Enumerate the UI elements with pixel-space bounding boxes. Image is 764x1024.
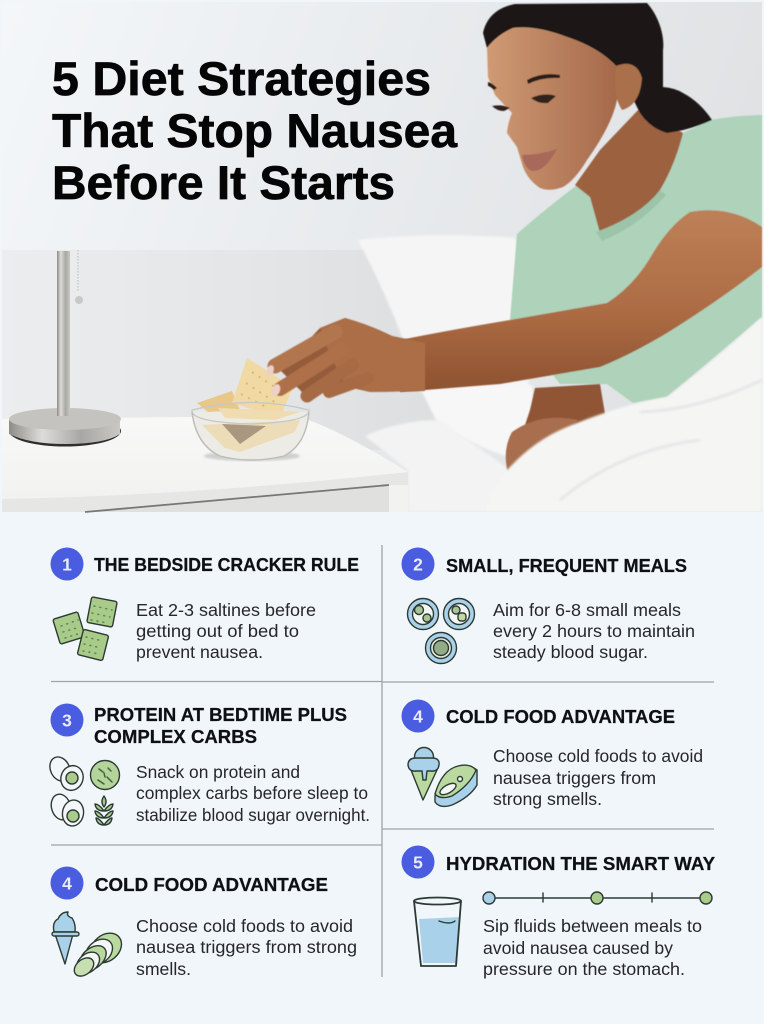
body text 3 <box>136 762 370 825</box>
body text 1: getting out of bed to <box>136 621 299 641</box>
icon: three small plates <box>408 598 474 664</box>
body text 4 left: nausea triggers from strong <box>136 937 357 957</box>
body text 2: every 2 hours to maintain <box>493 621 695 641</box>
timeline <box>483 892 712 904</box>
bed sheet <box>365 420 510 512</box>
body text 5: Sip fluids between meals to <box>483 916 702 936</box>
number badge 2 <box>402 548 434 580</box>
hand holding cracker <box>265 318 425 397</box>
title: Before It Starts <box>52 156 395 209</box>
body text 5: avoid nausea caused by <box>483 938 673 958</box>
heading 3 <box>94 704 347 747</box>
body text 1: Eat 2-3 saltines before <box>136 600 316 620</box>
body text 4 left <box>136 916 357 979</box>
panel: small, frequent meals <box>402 548 695 664</box>
bowl of crackers <box>192 358 309 461</box>
heading 4 left: COLD FOOD ADVANTAGE <box>95 874 328 895</box>
number badge 4 left <box>50 866 84 900</box>
number badge 4 left: 4 <box>62 874 72 894</box>
panel: cold food advantage (left) <box>50 866 357 980</box>
hero photo: woman reaching for crackers on nightstand <box>2 2 762 512</box>
number badge 4 right: 4 <box>413 706 423 726</box>
panel: protein at bedtime plus complex carbs <box>46 704 370 828</box>
icon: glass of water <box>414 898 461 966</box>
heading 4 right: COLD FOOD ADVANTAGE <box>446 706 675 727</box>
panel: cold food advantage (right) <box>402 700 703 809</box>
heading 1: THE BEDSIDE CRACKER RULE <box>94 554 359 575</box>
number badge 2: 2 <box>413 554 423 574</box>
body text 3: complex carbs before sleep to <box>136 783 368 803</box>
body text 1 <box>136 600 316 662</box>
icon: ice cream and salmon <box>408 748 477 806</box>
title: 5 Diet Strategies <box>52 52 431 105</box>
body text 1: prevent nausea. <box>136 642 263 662</box>
panel: the bedside cracker rule <box>50 548 359 662</box>
number badge 1 <box>50 548 84 580</box>
icon: ice cream cone and sliced vegetable <box>52 912 127 980</box>
heading 3: COMPLEX CARBS <box>94 726 257 747</box>
body text 4 right: Choose cold foods to avoid <box>493 746 703 766</box>
body text 4 left: smells. <box>136 959 191 979</box>
woman <box>400 3 762 473</box>
heading 2: SMALL, FREQUENT MEALS <box>446 555 687 576</box>
number badge 5 <box>402 846 434 878</box>
heading 5: HYDRATION THE SMART WAY <box>446 853 716 874</box>
pillow behind woman <box>358 235 535 456</box>
body text 5: pressure on the stomach. <box>483 959 685 979</box>
body text 3: stabilize blood sugar overnight. <box>136 805 370 825</box>
body text 5 <box>483 916 702 979</box>
number badge 3: 3 <box>62 710 72 730</box>
icon: eggs, seeds and grain <box>46 754 120 828</box>
number badge 5: 5 <box>413 852 423 872</box>
body text 3: Snack on protein and <box>136 762 300 782</box>
duvet <box>484 317 762 512</box>
body text 4 right: nausea triggers from <box>493 768 656 788</box>
body text 2 <box>493 600 695 662</box>
nightstand <box>2 417 408 512</box>
body text 4 right: strong smells. <box>493 789 602 809</box>
body text 2: Aim for 6-8 small meals <box>493 600 681 620</box>
number badge 4 right <box>402 700 434 732</box>
number badge 3 <box>50 704 84 736</box>
body text 4 left: Choose cold foods to avoid <box>136 916 353 936</box>
body text 2: steady blood sugar. <box>493 642 648 662</box>
heading 3: PROTEIN AT BEDTIME PLUS <box>94 704 347 725</box>
panel: hydration the smart way <box>402 846 716 979</box>
number badge 1: 1 <box>62 554 72 574</box>
body text 4 right <box>493 746 703 809</box>
title <box>52 52 458 209</box>
icon: saltine crackers <box>53 597 117 661</box>
title: That Stop Nausea <box>52 104 458 157</box>
table lamp <box>9 250 121 446</box>
